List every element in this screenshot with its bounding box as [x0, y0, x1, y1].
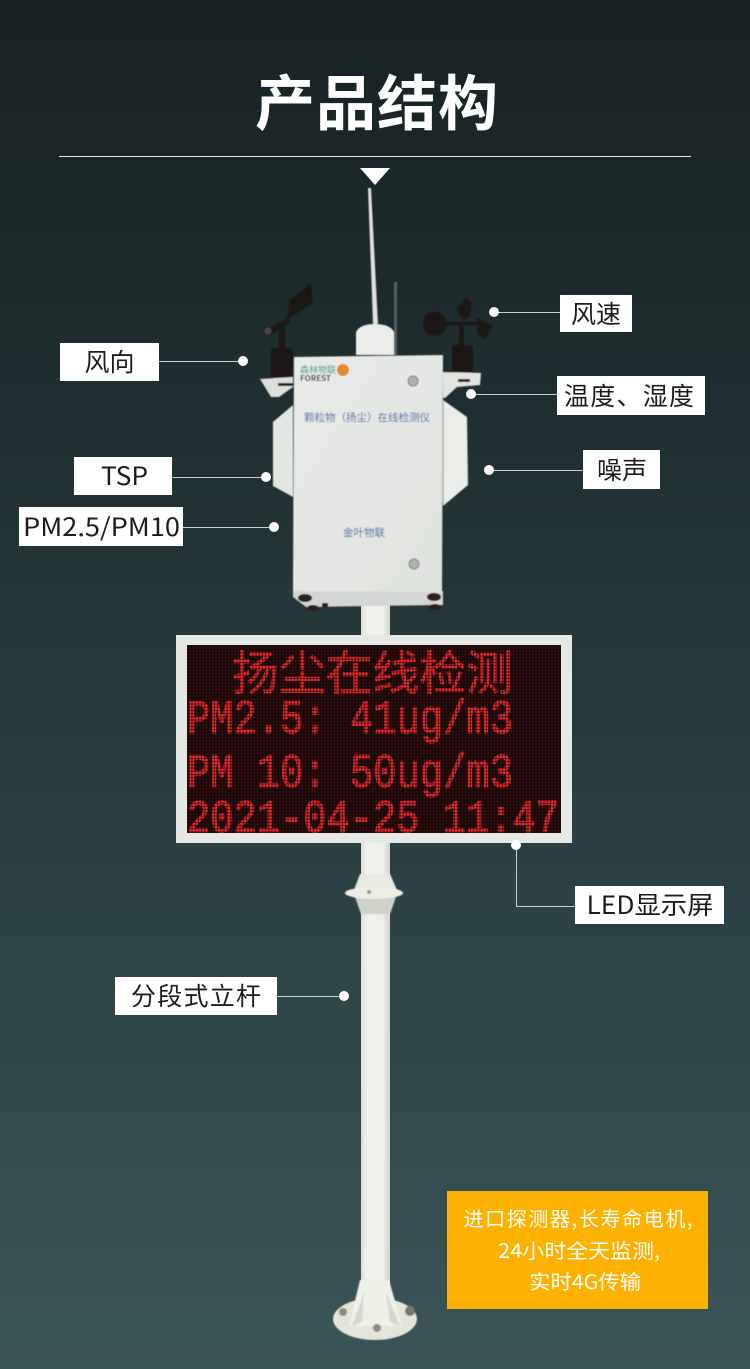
LED display — [176, 635, 572, 846]
antenna: small — [394, 282, 397, 355]
wind speed sensor — [423, 297, 493, 373]
label: wind direction: 风向 — [84, 343, 135, 379]
pole — [361, 600, 390, 1290]
wind vane sensor — [264, 283, 313, 378]
enclosure underside — [293, 591, 443, 607]
label: temperature and humidity: 温度、湿度 — [564, 377, 694, 413]
title: 产品结构 — [255, 56, 499, 143]
display text: 2021-04-25 11:47 — [187, 794, 559, 846]
label: PM2.5/PM10 — [19, 507, 279, 546]
label: LED screen: LED显示屏 — [586, 886, 714, 922]
label: wind speed: 风速 — [571, 295, 621, 331]
display text: 扬尘在线检测 — [232, 635, 513, 704]
callout: 实时4G传输 — [529, 1266, 641, 1295]
label: LED screen — [511, 840, 724, 924]
display text — [189, 650, 556, 833]
callout: 进口探测器,长寿命电机, — [464, 1203, 692, 1232]
callout — [447, 1191, 708, 1309]
device label: 颗粒物（扬尘）在线检测仪 — [304, 410, 430, 425]
label: wind direction — [60, 343, 248, 381]
mounting brackets — [260, 377, 293, 397]
pole base — [333, 1280, 417, 1340]
label: noise: 噪声 — [597, 451, 647, 487]
display text: PM2.5: 41ug/m3 — [187, 694, 513, 748]
brand logo: 森林物联 — [300, 363, 336, 376]
display text: PM 10: 50ug/m3 — [187, 748, 513, 802]
side panels — [273, 405, 293, 497]
label: wind speed — [489, 295, 632, 332]
monitoring device — [260, 188, 493, 611]
label: temperature and humidity — [466, 376, 705, 415]
enclosure feet — [298, 593, 441, 611]
label: noise — [484, 450, 660, 489]
enclosure body — [293, 355, 443, 592]
brand logo — [300, 363, 349, 384]
brand logo: FOREST — [300, 373, 331, 384]
pole flange — [345, 874, 403, 914]
antenna: main — [368, 188, 378, 324]
label: segmented pole — [115, 977, 349, 1015]
screws — [408, 376, 418, 386]
label: TSP — [74, 457, 271, 495]
device brand text: 金叶物联 — [343, 525, 385, 540]
label: PM2.5/PM10: PM2.5/PM10 — [23, 508, 180, 544]
callout: 24小时全天监测, — [498, 1235, 660, 1264]
label: TSP: TSP — [101, 457, 148, 493]
title divider with arrow — [59, 156, 691, 185]
label: segmented pole: 分段式立杆 — [131, 977, 261, 1013]
display frame — [176, 635, 572, 843]
sensor dome — [356, 324, 394, 355]
